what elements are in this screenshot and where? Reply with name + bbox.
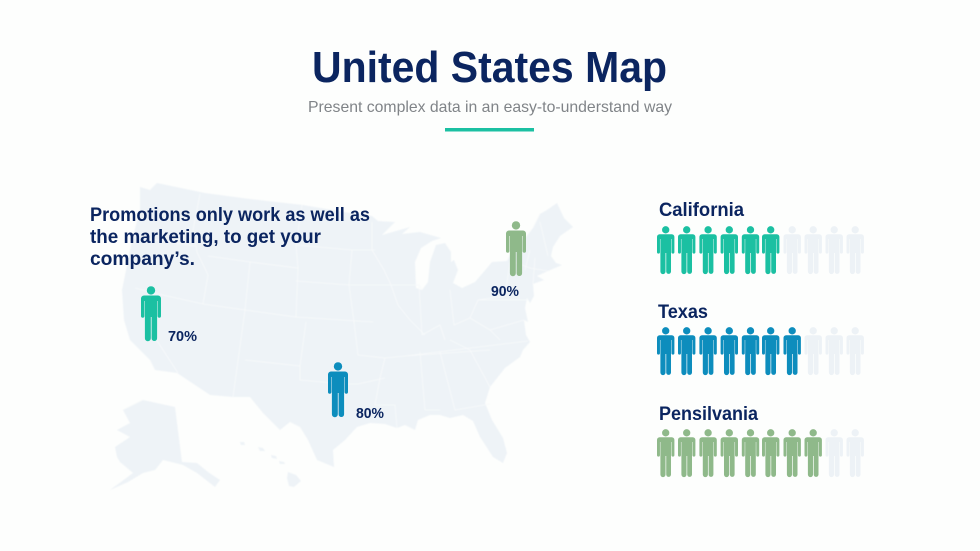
callout text: Promotions only work as well as [90, 204, 370, 226]
panel: Pensilvania pictogram [657, 403, 864, 477]
map marker: Texas 80% [328, 362, 384, 422]
panel: California pictogram: California [659, 199, 744, 221]
title accent bar [445, 128, 534, 132]
callout text: company’s. [90, 248, 195, 270]
panel: Pensilvania pictogram: Pensilvania [659, 403, 758, 425]
map marker: California 70% [141, 286, 197, 345]
panel: Texas pictogram: Texas [658, 301, 708, 323]
map marker: California 70%: 70% [168, 328, 197, 345]
map marker: Texas 80%: 80% [356, 405, 384, 422]
map marker: New York 90% [491, 221, 526, 300]
map: United States [110, 183, 573, 490]
map: Alaska [110, 400, 220, 490]
callout text: the marketing, to get your [90, 226, 321, 248]
panel: California pictogram [657, 199, 864, 274]
title: United States Map [312, 43, 667, 92]
map marker: New York 90%: 90% [491, 283, 519, 300]
callout text [90, 204, 370, 270]
map: contiguous states [122, 183, 573, 467]
map: Hawaii [240, 442, 301, 487]
panel: Texas pictogram [657, 301, 864, 375]
subtitle: Present complex data in an easy-to-understand way [308, 99, 672, 116]
map: state borders [135, 194, 548, 428]
